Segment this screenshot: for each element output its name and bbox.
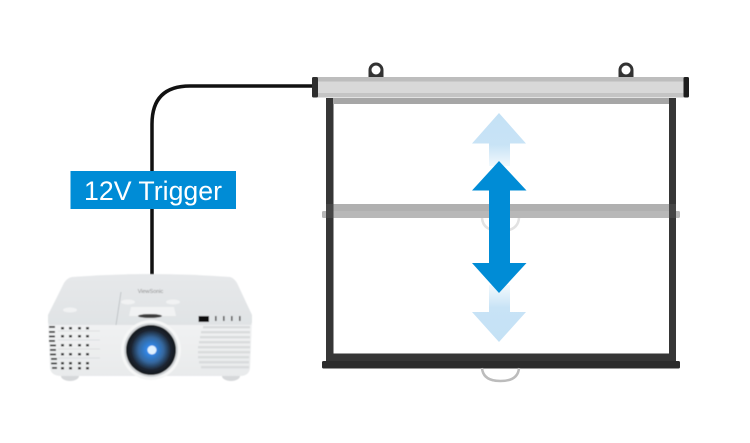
lens: [121, 320, 181, 380]
bottom handle: [482, 368, 519, 381]
sensor and indicator lights: [198, 316, 241, 322]
screen top shade: [333, 98, 669, 104]
projector top buttons: [63, 300, 180, 312]
lens recess: [129, 307, 176, 316]
brand name: ViewSonic: [138, 289, 164, 295]
label: 12V Trigger: [70, 171, 236, 209]
screen housing bar: [312, 77, 689, 98]
label: 12V Trigger: 12V Trigger: [84, 176, 222, 206]
projection screen: [312, 63, 689, 381]
faded mid-travel screen bar: [322, 204, 680, 218]
right vents: [198, 326, 250, 368]
cable: [152, 86, 314, 275]
arrow: solid double-headed: [472, 161, 526, 293]
projector lamp hatch line: [116, 292, 121, 325]
projector feet: [61, 371, 240, 381]
arrow: faded down: [472, 285, 526, 342]
vent ribs left: [58, 331, 100, 358]
screen hanging hooks: [368, 63, 634, 77]
screen side rails: [326, 98, 676, 362]
projector front: [48, 322, 252, 376]
bottom screen bar: [322, 354, 680, 368]
arrow: faded up: [472, 113, 526, 166]
projector top: [48, 274, 252, 325]
projector: [48, 274, 252, 381]
left vents: [49, 326, 89, 369]
faded mid-travel handle: [482, 218, 519, 231]
